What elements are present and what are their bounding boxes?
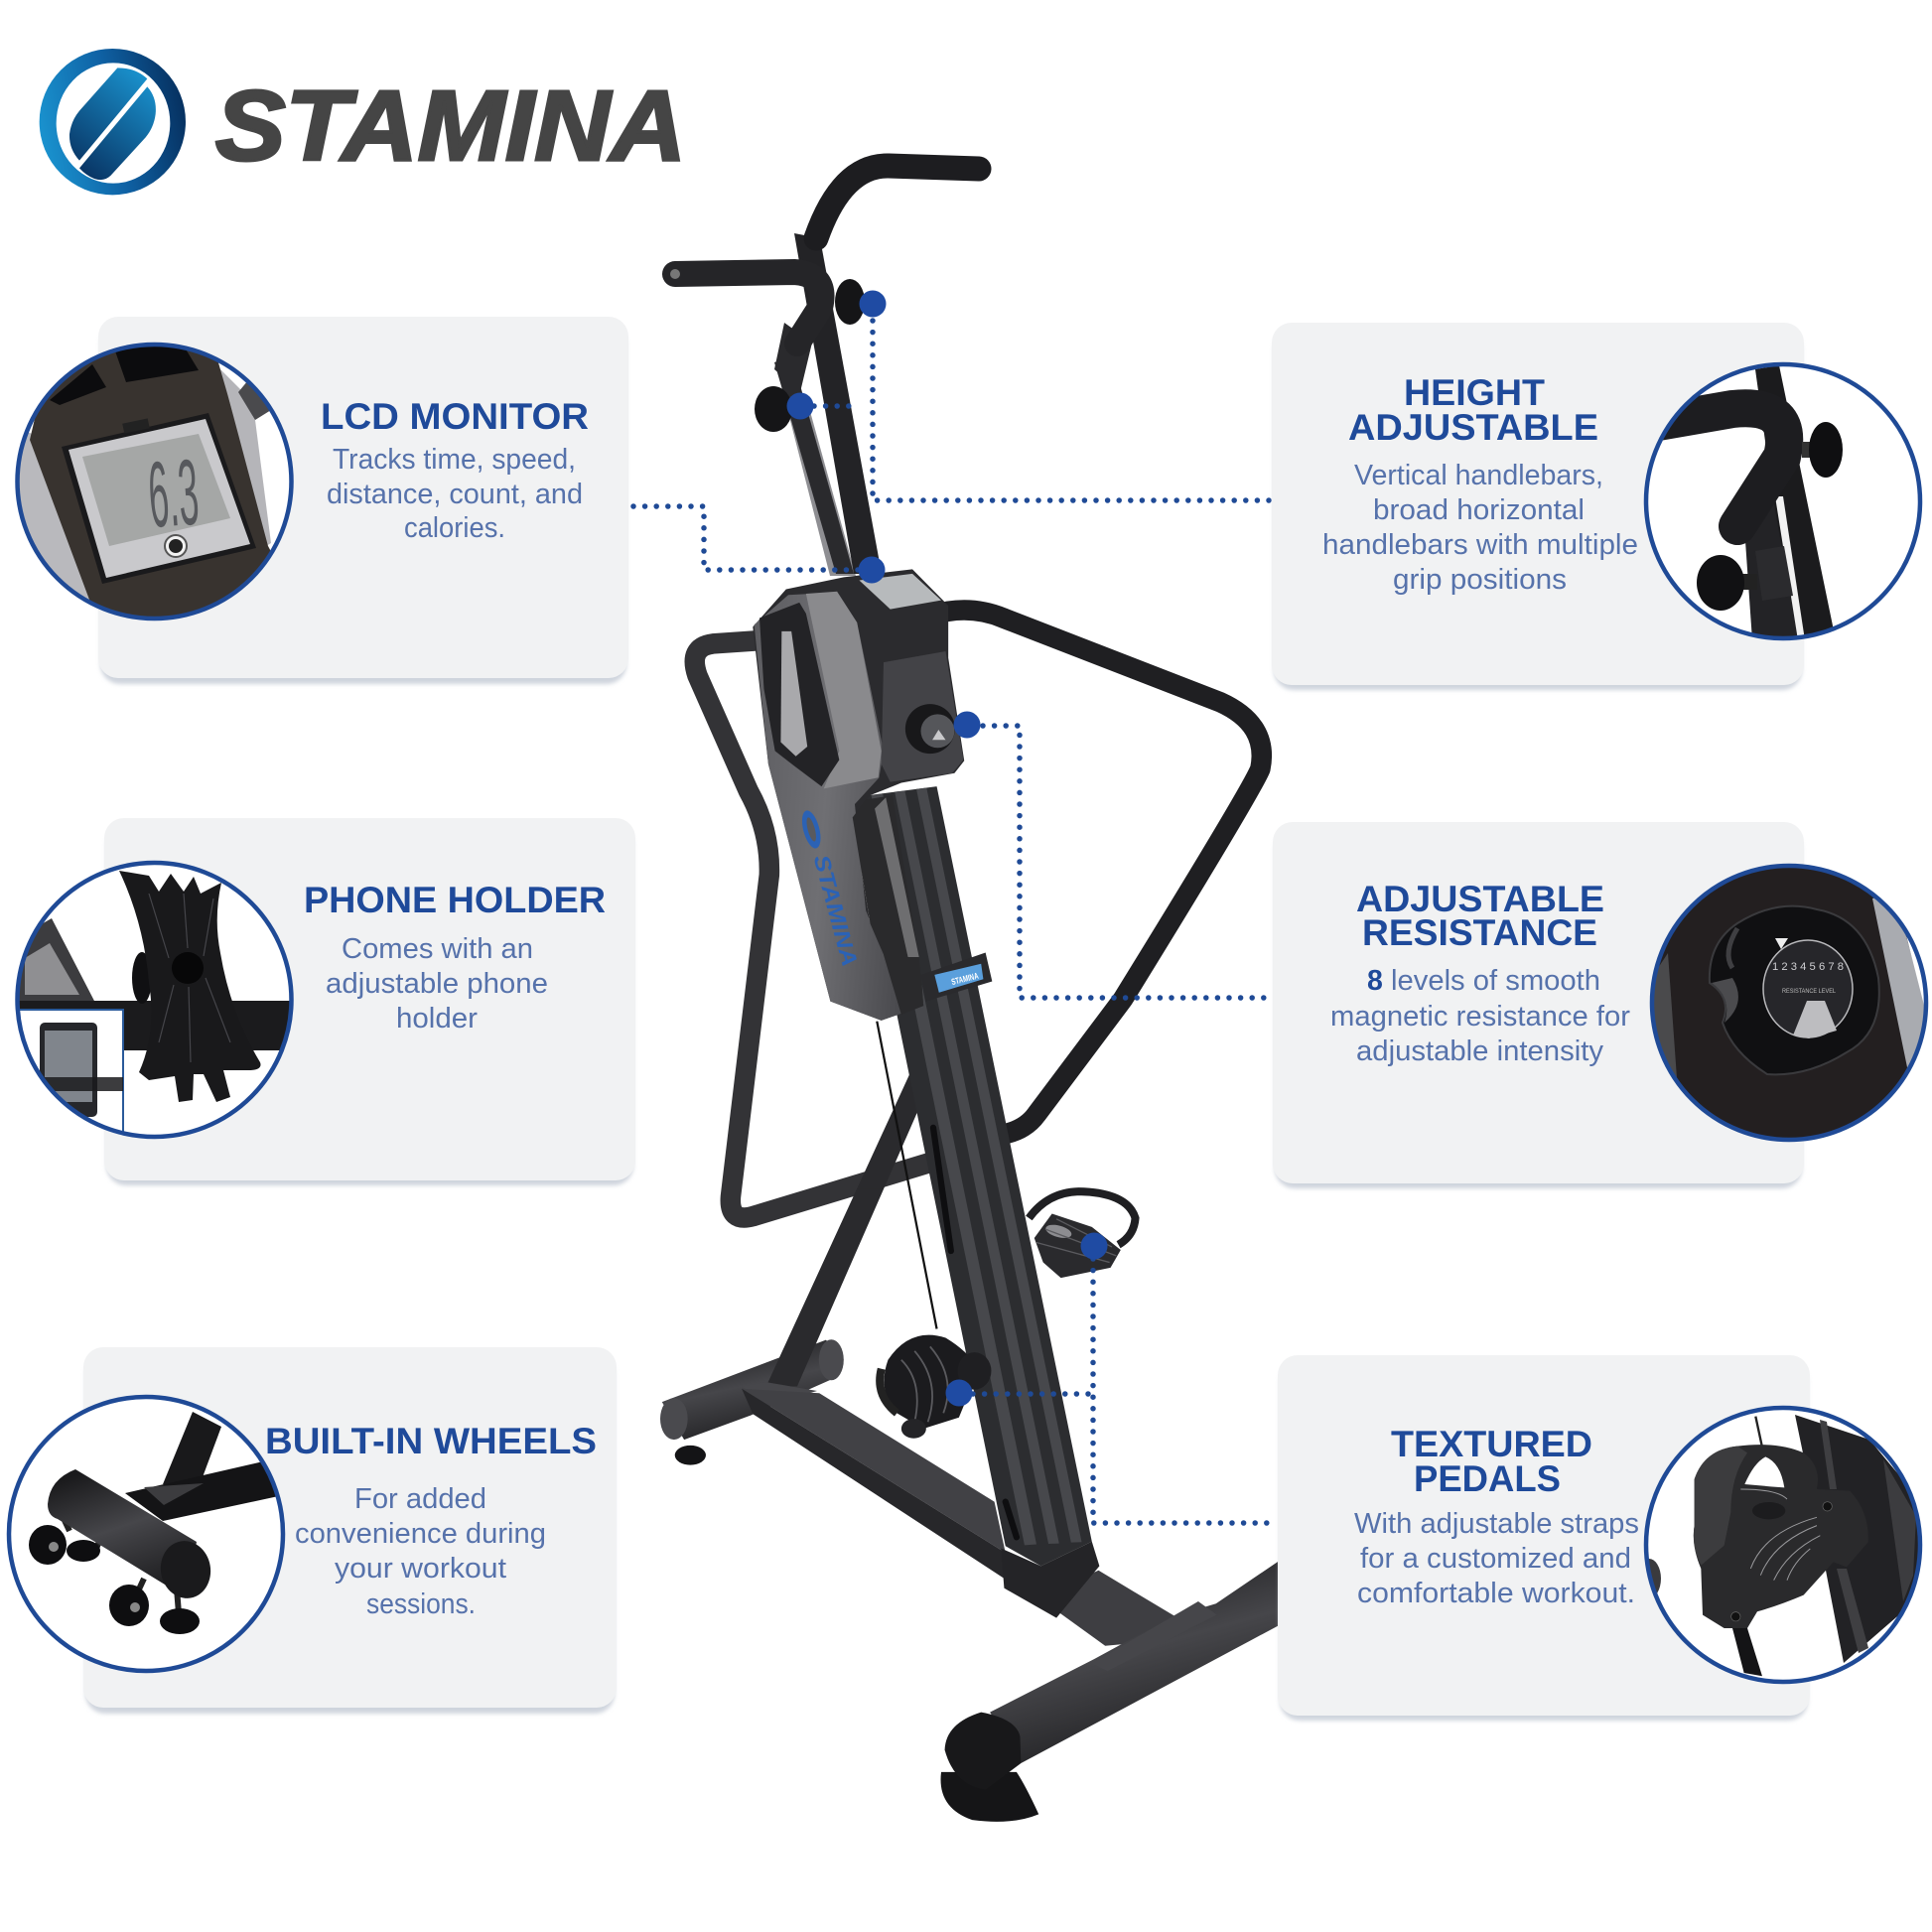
connector: textured pedals — [973, 1259, 1267, 1523]
description: distance, count, and — [327, 479, 583, 510]
description: adjustable intensity — [1356, 1035, 1604, 1067]
heading: LCD MONITOR — [321, 396, 589, 437]
side frame tubes — [695, 611, 1262, 1217]
front base tube — [941, 1562, 1278, 1822]
icon: stamina emblem — [40, 49, 186, 195]
front base stem — [1054, 1571, 1176, 1646]
description: convenience during — [295, 1518, 546, 1550]
description — [1330, 965, 1631, 1067]
connector: height adjustable — [814, 318, 1269, 500]
brand logo — [40, 49, 686, 195]
icon: wheels photo — [5, 1393, 288, 1676]
column band with badge — [921, 953, 992, 1002]
description — [326, 933, 548, 1035]
panel: phone holder — [15, 818, 635, 1185]
description: adjustable phone — [326, 968, 548, 1000]
description: sessions. — [366, 1588, 476, 1620]
panel: adjustable resistance — [1273, 822, 1931, 1188]
description: Tracks time, speed, — [333, 444, 576, 476]
icon: resistance knob photo: RESISTANCE LEVEL — [1782, 989, 1837, 995]
heading: HEIGHT — [1404, 372, 1545, 413]
description: for a customized and — [1360, 1543, 1631, 1575]
description — [295, 1483, 546, 1620]
panel: textured pedals — [1278, 1355, 1926, 1721]
icon: LCD photo: 6.3 — [145, 440, 202, 547]
upper handlebars and posts — [670, 166, 979, 576]
heading: PEDALS — [1414, 1458, 1561, 1499]
icon: phone holder photo — [15, 859, 298, 1142]
heading — [1391, 1424, 1592, 1499]
description: handlebars with multiple — [1322, 529, 1638, 561]
lower pedal — [880, 1335, 991, 1439]
heading: TEXTURED — [1391, 1424, 1592, 1464]
console brand mark: STAMINA — [809, 852, 863, 969]
description — [1322, 460, 1638, 596]
icon: pedal photo — [1637, 1405, 1926, 1688]
connector: LCD monitor — [633, 506, 864, 570]
console brand mark — [798, 808, 863, 969]
connector: adjustable resistance — [983, 726, 1267, 998]
description: broad horizontal — [1373, 494, 1585, 526]
heading: ADJUSTABLE — [1356, 879, 1604, 919]
description: With adjustable straps — [1354, 1508, 1639, 1540]
heading — [1348, 372, 1598, 448]
panel: built-in wheels — [5, 1347, 617, 1714]
description: your workout — [335, 1553, 506, 1585]
description: grip positions — [1393, 564, 1567, 596]
description: For added — [354, 1483, 486, 1515]
icon: resistance knob photo: 1 2 3 4 5 6 7 8 — [1772, 961, 1844, 973]
heading: PHONE HOLDER — [304, 880, 606, 920]
marker dots — [786, 290, 1108, 1406]
icon: LCD photo — [15, 338, 298, 635]
rear a-frame strut — [766, 1039, 947, 1387]
description: comfortable workout. — [1357, 1578, 1635, 1609]
heading: RESISTANCE — [1362, 912, 1597, 953]
heading: ADJUSTABLE — [1348, 407, 1598, 448]
panel: LCD monitor — [15, 317, 628, 684]
description: Comes with an — [342, 933, 533, 965]
heading: BUILT-IN WHEELS — [265, 1421, 597, 1461]
description — [1354, 1508, 1639, 1609]
strut over foot — [766, 1189, 884, 1387]
console housing — [753, 569, 992, 1021]
icon: resistance knob photo — [1648, 862, 1931, 1145]
centre base beam — [742, 1389, 1006, 1580]
heading — [1356, 879, 1604, 953]
description: levels of smooth — [1391, 965, 1600, 997]
stepper machine — [660, 166, 1278, 1822]
wordmark: STAMINA — [215, 70, 686, 182]
description: holder — [396, 1003, 479, 1035]
description: calories. — [404, 512, 505, 544]
resistance column — [853, 786, 1099, 1618]
description: magnetic resistance for — [1330, 1001, 1631, 1033]
console screen — [859, 574, 941, 610]
description: 8 — [1367, 965, 1383, 997]
rear foot tube — [660, 1339, 844, 1465]
description — [327, 444, 583, 544]
upper pedal — [1029, 1191, 1136, 1278]
description: Vertical handlebars, — [1354, 460, 1603, 491]
resistance knob — [905, 704, 955, 754]
icon: height adjustment photo — [1643, 362, 1926, 645]
column band with badge: STAMINA — [950, 971, 980, 987]
panel: height adjustable — [1272, 323, 1926, 690]
